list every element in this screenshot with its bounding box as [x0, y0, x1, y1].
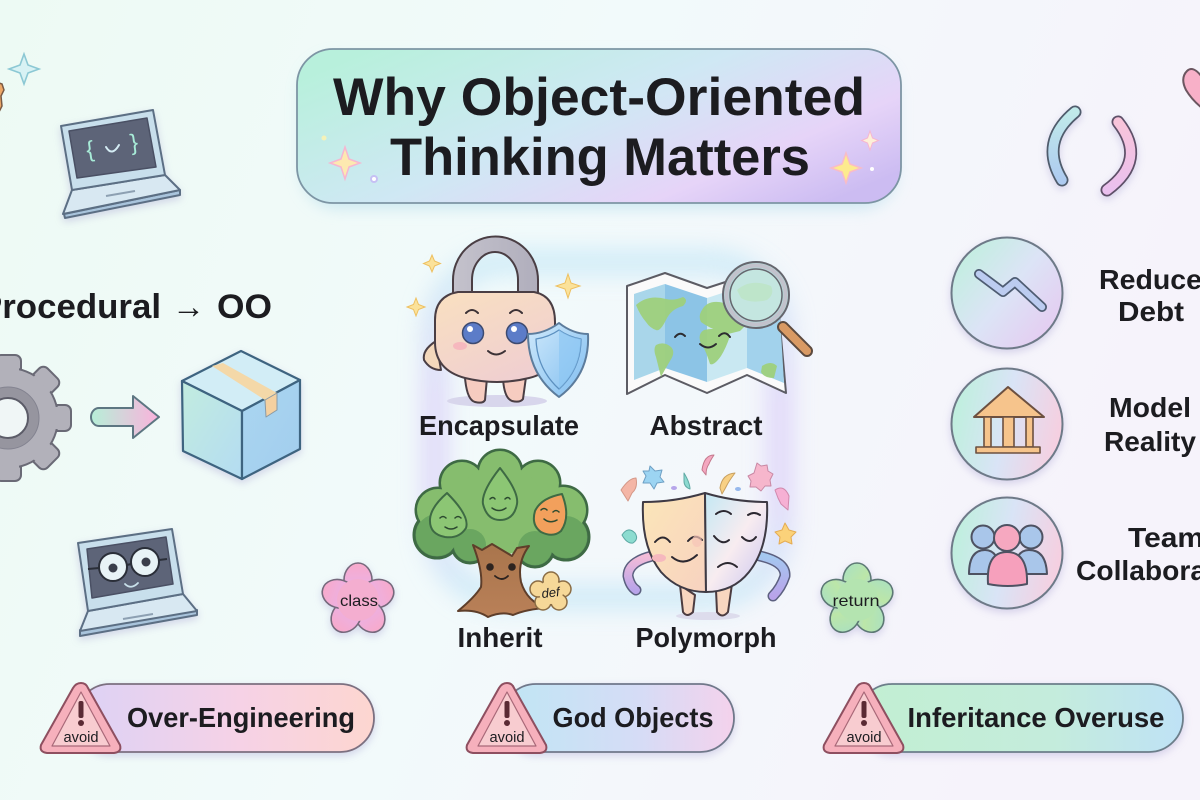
icon: tree with leaf characters — [414, 450, 589, 617]
label: inherit: Inherit — [458, 622, 542, 653]
icon: warning triangle — [824, 683, 903, 753]
keyword flower: return: return — [832, 593, 880, 610]
icon: parentheses — [1053, 112, 1131, 190]
pill — [502, 684, 734, 752]
panel: procedural to OO — [0, 288, 300, 481]
panel: warning over-engineering — [41, 683, 374, 753]
icon: laptop with glasses — [78, 529, 197, 636]
label: team collaboration: Team — [1128, 522, 1200, 553]
panel: concept - encapsulate — [407, 236, 588, 441]
label: Inferitance Overuse — [908, 702, 1164, 733]
label: def flower — [530, 572, 571, 610]
icon: top right heart — [1183, 69, 1200, 108]
pill — [858, 684, 1183, 752]
icon: warning triangle: avoid — [64, 729, 98, 746]
label: def flower: def — [541, 584, 562, 601]
label: encapsulate: Encapsulate — [419, 410, 579, 441]
label: God Objects — [552, 702, 714, 733]
icon: warning triangle — [467, 683, 546, 753]
label: abstract: Abstract — [650, 410, 762, 441]
label: reduce debt: Reduce — [1099, 264, 1200, 295]
keyword flower: class — [318, 563, 398, 638]
icon: padlock character — [424, 236, 588, 407]
pill — [76, 684, 374, 752]
icon: laptop with code braces: { — [84, 136, 96, 162]
panel: benefit team collaboration — [952, 498, 1200, 608]
icon: declining line circle — [952, 238, 1062, 348]
label: reduce debt: Debt — [1118, 296, 1184, 327]
icon: decorative star fragments — [0, 54, 39, 114]
sparkles — [407, 255, 580, 316]
icon: laptop with code braces — [61, 110, 180, 218]
panel: benefit model reality — [952, 368, 1196, 480]
glow ring behind concept icons — [435, 262, 780, 597]
icon: team people circle — [952, 498, 1062, 608]
confetti — [621, 455, 796, 544]
panel: benefit reduce debt — [952, 238, 1200, 348]
icon: comedy tragedy mask — [628, 493, 785, 620]
label: model reality: Reality — [1104, 426, 1196, 457]
icon: classical building circle — [952, 368, 1062, 480]
panel: concept - polymorph — [621, 455, 796, 653]
heading: procedural to OO: → — [172, 288, 205, 326]
icon: laptop with code braces: } — [128, 129, 140, 155]
icon: warning triangle: avoid — [846, 729, 882, 746]
icon: box — [182, 351, 300, 479]
arrow: gear to box — [91, 396, 159, 438]
title text: Why Object-Oriented — [333, 68, 865, 127]
sparkles — [322, 131, 878, 183]
title text line 2: Thinking Matters — [390, 128, 810, 187]
label: model reality — [1104, 392, 1196, 457]
icon: warning triangle — [41, 683, 120, 753]
keyword flower: class: class — [340, 593, 378, 610]
panel: warning inheritance overuse — [824, 683, 1183, 753]
label: polymorph: Polymorph — [636, 622, 776, 653]
label: team collaboration — [1076, 522, 1200, 586]
label: model reality: Model — [1109, 392, 1191, 423]
label: reduce debt — [1099, 264, 1200, 327]
panel: concept - abstract — [627, 262, 807, 441]
heading: procedural to OO: OO — [217, 288, 272, 326]
panel: warning god objects — [467, 683, 734, 753]
icon: world map with magnifier — [627, 262, 807, 394]
title banner — [297, 49, 901, 208]
keyword flower: return — [817, 563, 897, 638]
panel: concept - inherit — [414, 450, 589, 653]
label: Over-Engineering — [127, 702, 355, 733]
icon: warning triangle: avoid — [490, 729, 524, 746]
icon: gear — [0, 355, 71, 481]
